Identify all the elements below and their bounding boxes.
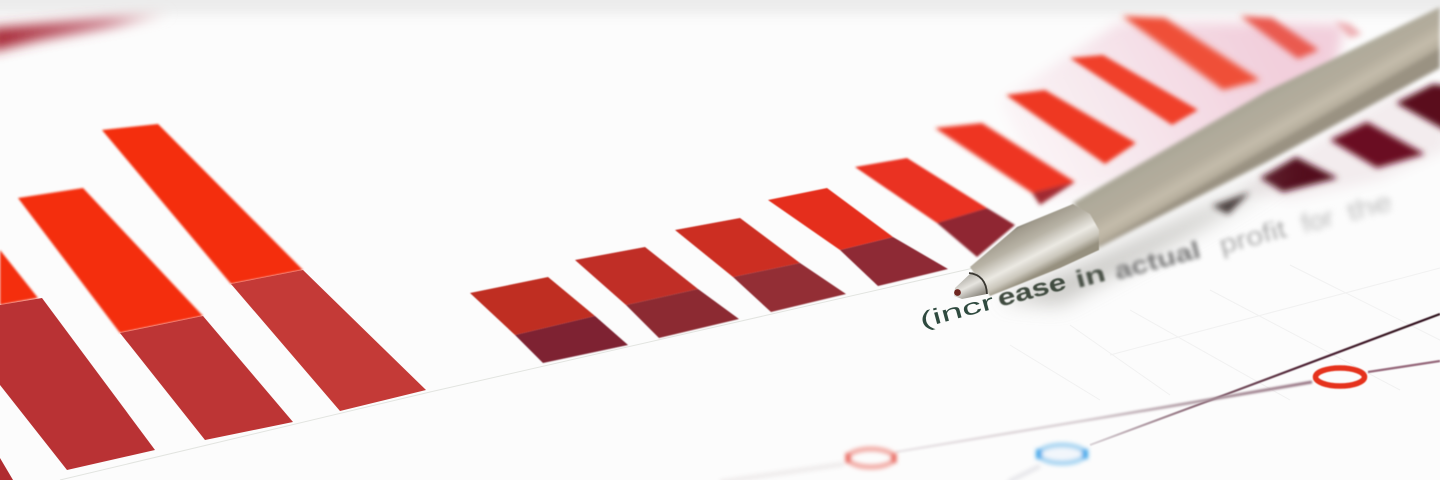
pink haze behind far bars [1000, 22, 1345, 205]
line: light series [1368, 361, 1440, 372]
caption text on paper: for [1298, 201, 1337, 239]
bar: foreground 1 [102, 124, 426, 411]
pale gaps between dark bars [1240, 90, 1440, 200]
bar: far 6 [1240, 16, 1319, 59]
bar: far 4 [1070, 55, 1198, 125]
bar: far 2 [935, 123, 1075, 205]
pen: barrel [1073, 7, 1440, 248]
bar: mid 3 [675, 218, 846, 312]
marker: pink circle [848, 449, 894, 467]
caption text on paper: the [1344, 186, 1395, 227]
faint grid lines [1010, 265, 1440, 400]
line: dark series [1090, 314, 1440, 445]
bar: foreground 3 [0, 250, 155, 470]
pen [954, 7, 1440, 299]
caption text on paper: profit [1216, 213, 1290, 260]
pen: collar cone [970, 204, 1099, 296]
chart baseline [60, 262, 1000, 480]
caption text on paper: in [1073, 260, 1109, 294]
pen: tip [954, 272, 987, 299]
marker: red circle [1316, 368, 1364, 386]
bar: foreground 4 [0, 458, 13, 480]
bar: mid 1 [470, 277, 628, 363]
pen shadow on paper [1000, 165, 1300, 305]
line chart [720, 314, 1440, 480]
bar: far 5 [1122, 16, 1260, 90]
caption text on paper: ease [995, 269, 1069, 313]
bar: far 1 [855, 158, 1015, 257]
caption text on paper: actual [1111, 236, 1204, 286]
bar: far 3 [1006, 90, 1136, 164]
caption text on paper [917, 186, 1395, 333]
dark bars behind pen [1212, 84, 1440, 214]
bar: mid 2 [575, 247, 739, 338]
bar: far 7 [1335, 22, 1362, 38]
blurred red streak, top left [0, 13, 170, 52]
caption text on paper: (incr [917, 289, 997, 333]
marker: blue circle [1039, 445, 1085, 463]
bar: mid 4 [768, 188, 948, 286]
bar: foreground 2 [18, 188, 293, 440]
